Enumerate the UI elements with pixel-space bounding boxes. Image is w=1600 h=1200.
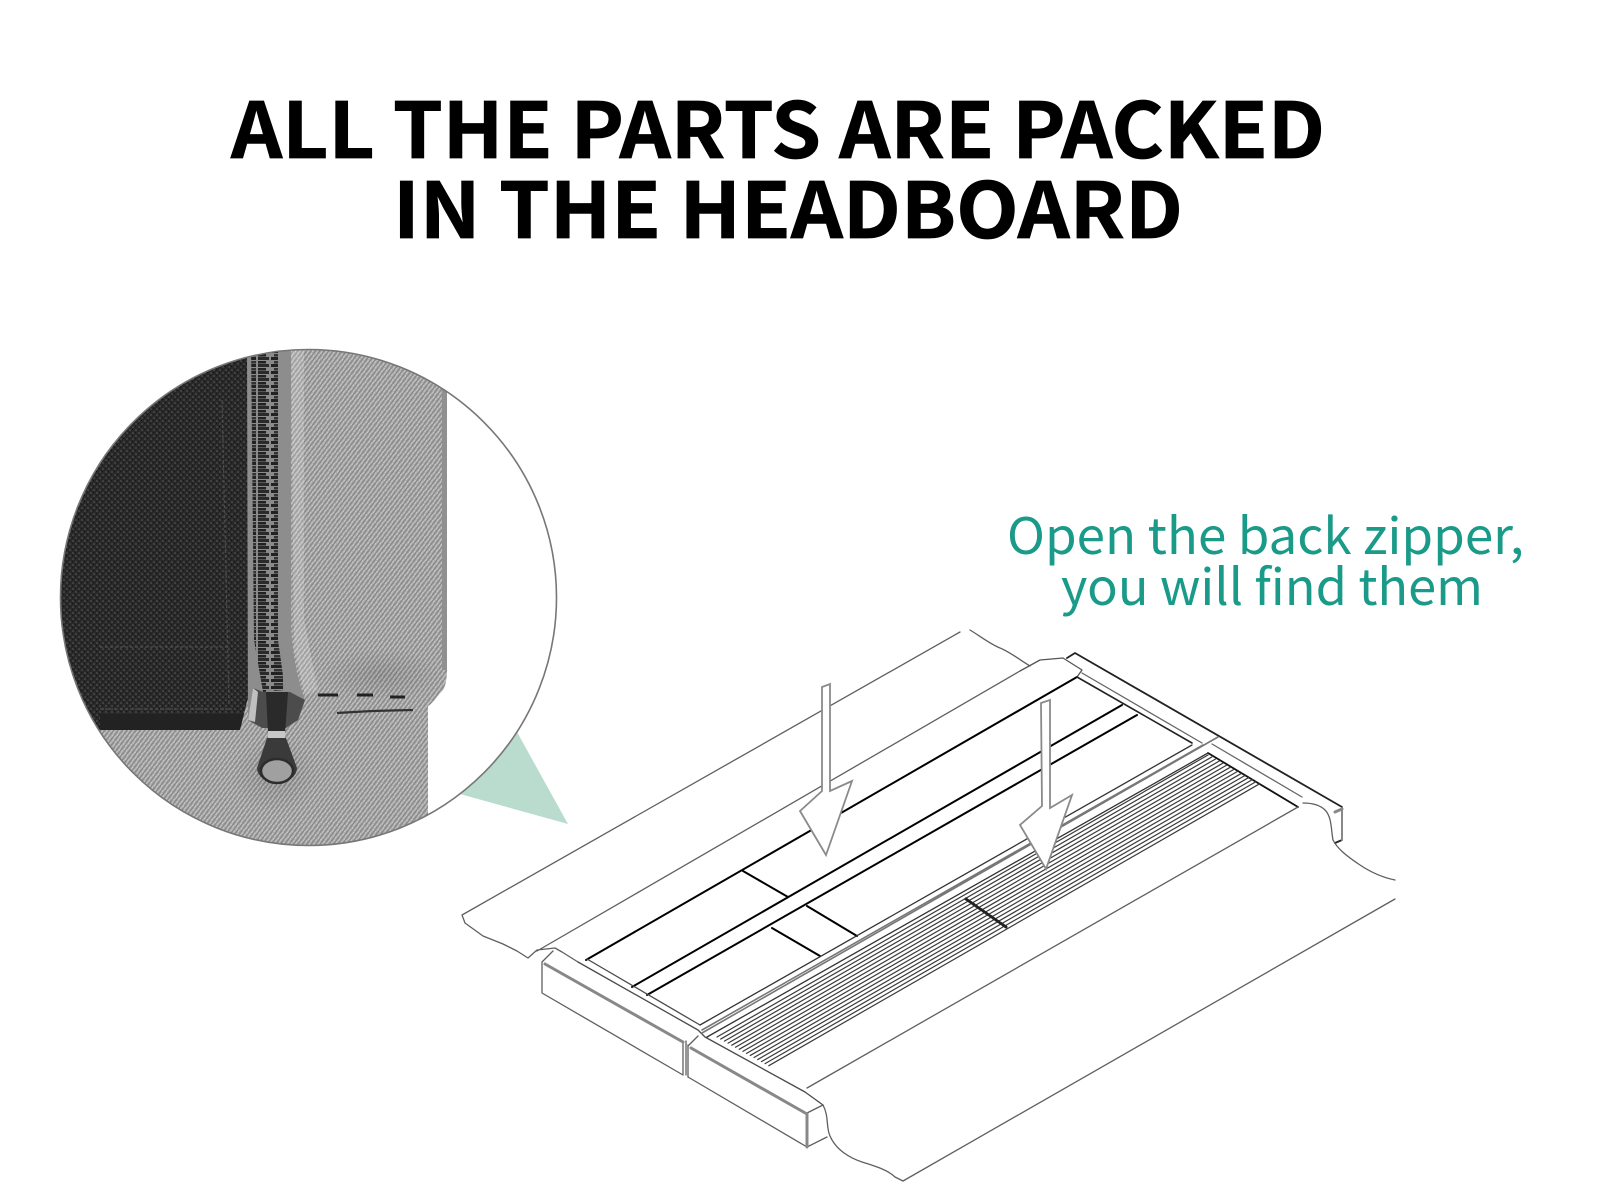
zipper pull tab <box>257 731 297 783</box>
upper grey fabric panel <box>286 345 447 712</box>
fabric right edge shade <box>442 390 447 670</box>
instruction text: you will find them <box>1061 548 1483 620</box>
lower board <box>807 807 1395 1181</box>
zipper tape <box>247 345 305 726</box>
callout pointer triangle <box>440 732 568 824</box>
front frame edge <box>578 959 823 1105</box>
right frame edge <box>1067 653 1342 843</box>
upper fabric soft shading <box>345 660 414 690</box>
seam stitches <box>318 695 405 697</box>
bed frame line drawing <box>462 630 1395 1181</box>
centre long rail <box>700 737 1218 1037</box>
lower grey fabric <box>100 696 428 845</box>
arrow: left down arrow <box>800 684 852 855</box>
lens outline <box>60 350 556 846</box>
instruction text: Open the back zipper, <box>1007 497 1524 569</box>
slat dividers: long black rails <box>586 677 1137 995</box>
top rail end <box>1020 658 1082 677</box>
zipper slider <box>248 688 305 734</box>
top fold-over flap <box>462 630 1030 962</box>
title: ALL THE PARTS ARE PACKED <box>230 70 1325 181</box>
fabric light band beside zipper <box>291 345 318 695</box>
zipper teeth <box>251 345 285 692</box>
arrow: right down arrow <box>1020 700 1072 869</box>
zoomed detail circle: zipper photo <box>55 345 556 860</box>
end block left <box>542 951 688 1077</box>
dark panel fabric <box>55 345 250 730</box>
title <box>230 70 1325 261</box>
title: IN THE HEADBOARD <box>393 150 1183 261</box>
slats <box>717 755 1260 1066</box>
instruction text <box>1007 497 1524 620</box>
lower board wavy edges <box>823 803 1395 1181</box>
lower fabric soft shading <box>249 758 300 796</box>
end block right <box>688 1036 827 1147</box>
slat joint <box>966 899 1006 927</box>
